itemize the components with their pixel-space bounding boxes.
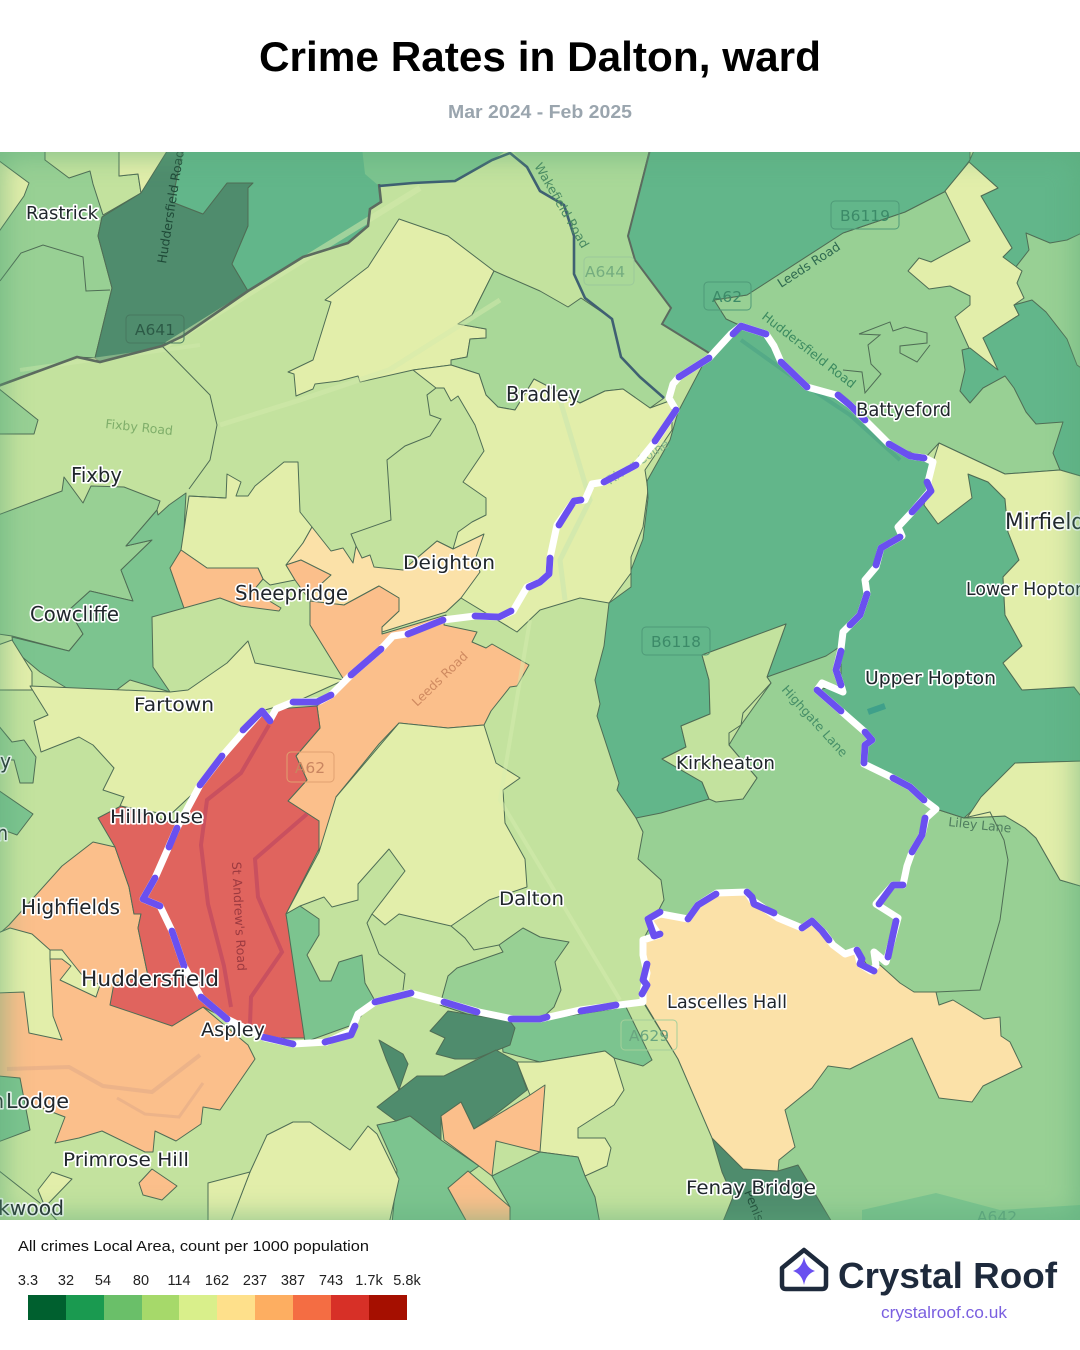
subtitle: date range: Mar 2024 - Feb 2025 [448,102,632,122]
place labels [0,203,1080,1220]
place labels: Hillhouse [110,806,203,828]
place labels: Bradley [506,382,580,406]
road name labels [105,149,1012,1250]
legend tick values: 237 [243,1273,267,1289]
website: crystalroof.co.uk [881,1304,1008,1322]
road shields: A644 [585,263,625,281]
road name labels: Leeds Road [774,239,843,291]
place labels: Upper Hopton [865,668,996,689]
legend colour scale [28,1295,407,1320]
icon: house with star [782,1250,826,1289]
place labels: Fixby [71,463,122,487]
place labels: Huddersfield [81,967,219,991]
road name labels: Fixby Road [105,416,174,438]
legend tick values: 743 [319,1273,343,1289]
road shields: B6119 [840,207,890,225]
road shields: B6118 [651,633,701,651]
place labels: Aspley [201,1019,265,1041]
road name labels: River Colne [603,436,672,488]
legend [18,1238,421,1320]
road shields: A62 [712,288,742,306]
road shields: A629 [629,1027,669,1045]
road shields: A62 [295,759,325,777]
place labels: y [0,749,11,773]
road name labels: St Andrew's Road [229,861,250,971]
road name labels: Huddersfield Road [759,309,859,391]
place labels: Sheepridge [235,581,348,605]
choropleth map [0,152,1080,1220]
place labels: Rastrick [26,203,99,224]
legend tick values: 80 [133,1273,149,1289]
brand name: Crystal Roof [838,1255,1058,1296]
road name labels: Highgate Lane [779,682,851,760]
place labels: Battyeford [856,399,951,421]
legend tick values: 387 [281,1273,305,1289]
legend tick values: 162 [205,1273,229,1289]
legend title: All crimes Local Area, count per 1000 population [18,1238,369,1255]
light road network and boundary lines [0,150,1008,1224]
road shields [126,201,1017,1226]
ward boundary: white line with purple dashes [143,326,936,1044]
legend tick values: 5.8k [393,1273,421,1289]
title: Crime Rates in Dalton, ward [259,33,821,80]
place labels: Lodge [6,1089,69,1113]
legend tick values: 54 [95,1273,111,1289]
road name labels: Leeds Road [409,648,471,709]
legend tick values: 3.3 [18,1273,38,1289]
place labels: Fartown [134,694,214,716]
logo: Crystal Roof [780,1248,1058,1322]
place labels: Kirkheaton [676,753,775,774]
base map areas [0,148,1080,1224]
place labels: Fenay Bridge [686,1177,816,1199]
legend tick values: 114 [167,1273,191,1289]
legend tick values [18,1273,421,1289]
road name labels: Huddersfield Road [154,152,187,264]
place labels: Highfields [21,895,120,919]
place labels: Cowcliffe [30,602,119,626]
road name labels: Liley Lane [948,814,1012,836]
legend tick values: 32 [58,1273,74,1289]
road shields: A641 [135,321,175,339]
legend tick values: 1.7k [355,1273,383,1289]
place labels: Primrose Hill [63,1149,189,1171]
road name labels: Wakefield Road [531,160,592,251]
place labels: Dalton [499,888,564,910]
place labels: Deighton [403,552,495,574]
place labels: Lascelles Hall [667,992,787,1013]
